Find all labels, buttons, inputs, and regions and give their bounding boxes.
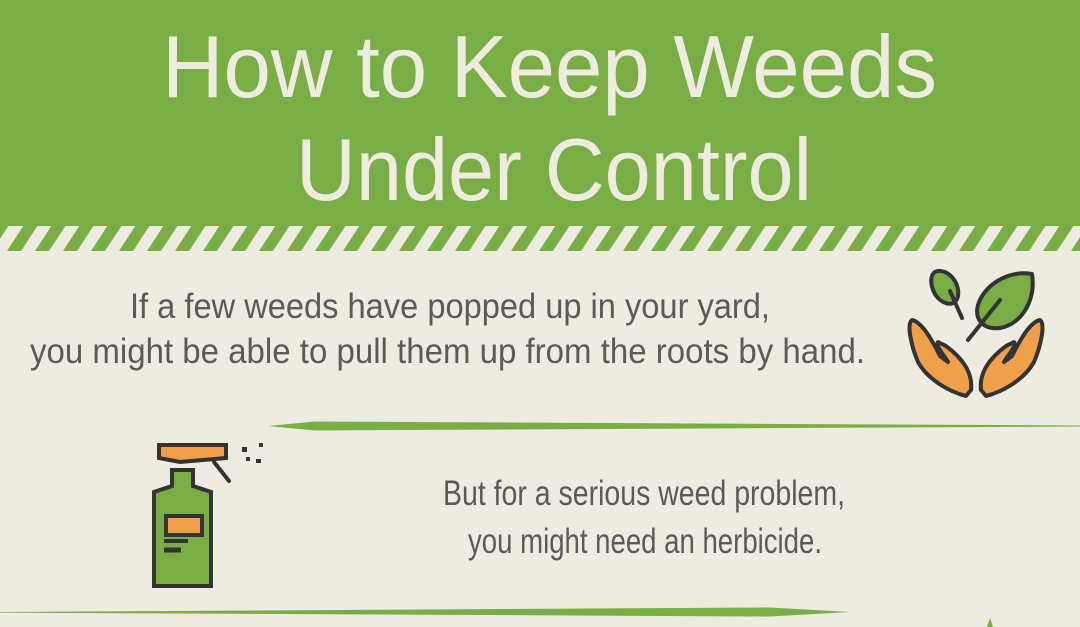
title: How to Keep Weeds bbox=[162, 17, 937, 116]
text block: herbicide: you might need an herbicide. bbox=[468, 522, 822, 561]
text block: herbicide bbox=[443, 474, 845, 561]
header banner bbox=[0, 0, 1080, 251]
icon: hands with leaves bbox=[910, 271, 1042, 396]
divider arrow 2 bbox=[0, 608, 850, 616]
text block: pull weeds by hand: If a few weeds have popped up in your yard, bbox=[130, 287, 770, 326]
title: Under Control bbox=[296, 120, 812, 219]
bottom decoration bbox=[987, 618, 993, 627]
text block: herbicide: But for a serious weed problem, bbox=[443, 474, 845, 513]
text block: pull weeds by hand: you might be able to pull them up from the roots by hand. bbox=[30, 332, 865, 371]
text block: pull weeds by hand bbox=[30, 287, 865, 371]
icon: spray bottle bbox=[154, 443, 263, 586]
divider arrow 1 bbox=[268, 422, 1080, 430]
title bbox=[162, 17, 937, 219]
